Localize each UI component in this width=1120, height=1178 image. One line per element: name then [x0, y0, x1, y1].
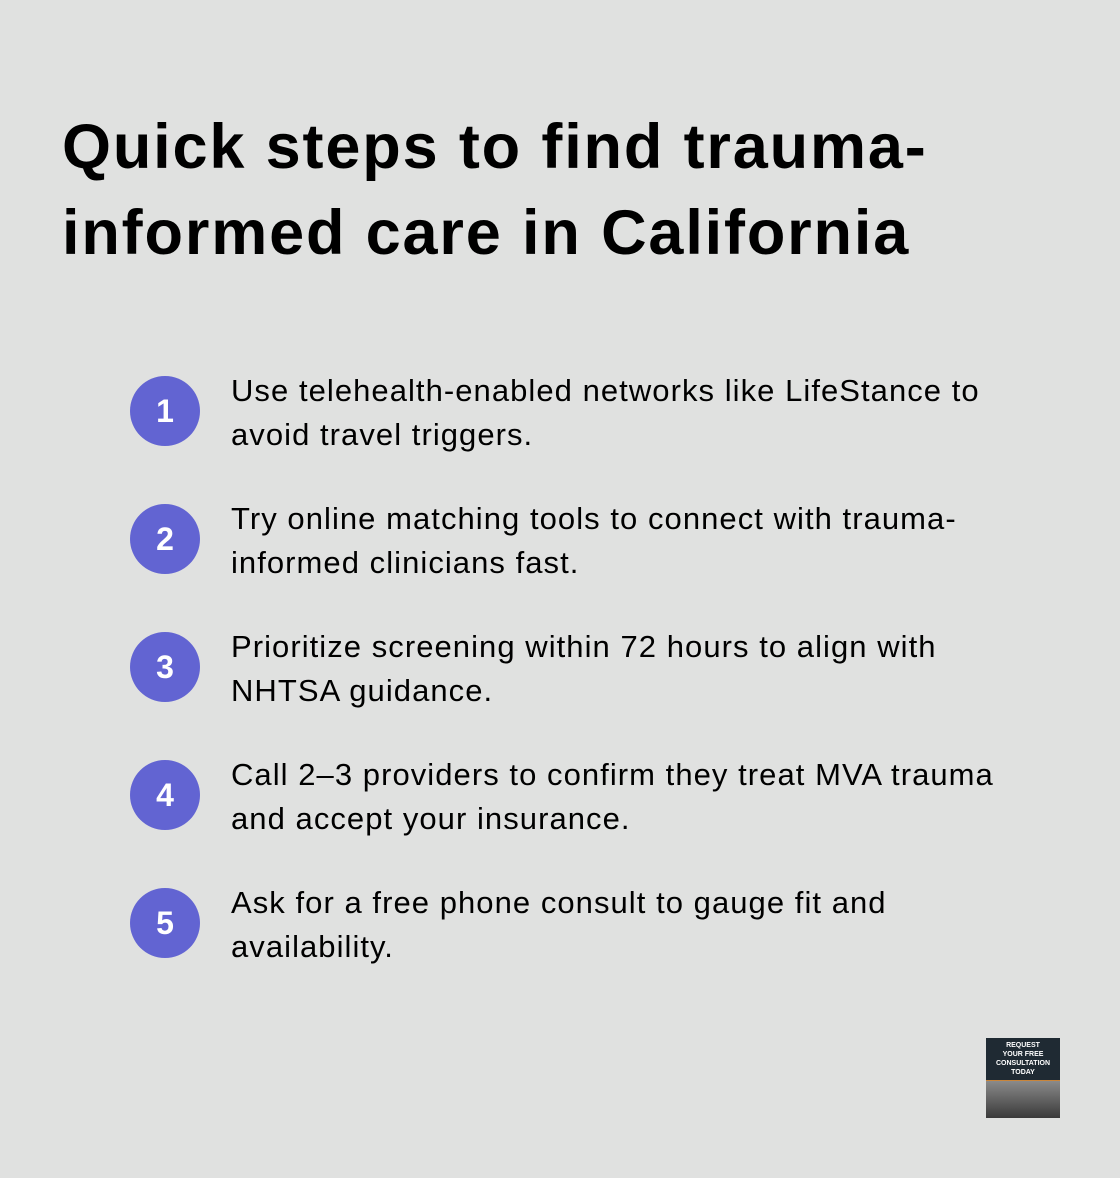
number circle 3 — [130, 632, 200, 702]
number circle 1 — [130, 376, 200, 446]
number circle 2: 2 — [156, 521, 174, 557]
title — [62, 112, 928, 268]
logo: consultation badge: TODAY — [1011, 1069, 1035, 1076]
step 1 — [130, 373, 980, 452]
step 1 text — [231, 373, 980, 452]
step 3 text: Prioritize screening within 72 hours to align with — [231, 629, 937, 664]
number circle 3: 3 — [156, 649, 174, 685]
logo: consultation badge: REQUEST — [1006, 1042, 1040, 1049]
step 2 — [130, 501, 957, 580]
step 4 — [130, 757, 994, 836]
step 1 text: Use telehealth-enabled networks like LifeStance to — [231, 373, 980, 408]
number circle 4 — [130, 760, 200, 830]
step 4 text: Call 2–3 providers to confirm they treat MVA trauma — [231, 757, 994, 792]
number circle 1: 1 — [156, 393, 174, 429]
number circle 5 — [130, 888, 200, 958]
title: Quick steps to find trauma- — [62, 112, 928, 182]
step 3 text — [231, 629, 937, 708]
step 5 text: Ask for a free phone consult to gauge fit and — [231, 885, 887, 920]
step 2 text — [231, 501, 957, 580]
step 2 text: Try online matching tools to connect with trauma- — [231, 501, 957, 536]
step 5 — [130, 885, 887, 964]
step 1 text: avoid travel triggers. — [231, 417, 533, 452]
step 5 text — [231, 885, 887, 964]
number circle 4: 4 — [156, 777, 174, 813]
number circle 2 — [130, 504, 200, 574]
logo: consultation badge: YOUR FREE — [1003, 1051, 1043, 1058]
step 2 text: informed clinicians fast. — [231, 545, 579, 580]
step 3 — [130, 629, 937, 708]
number circle 5: 5 — [156, 905, 174, 941]
logo: consultation badge — [986, 1038, 1060, 1117]
title: informed care in California — [62, 198, 910, 268]
step 4 text — [231, 757, 994, 836]
step 4 text: and accept your insurance. — [231, 801, 631, 836]
step 3 text: NHTSA guidance. — [231, 673, 493, 708]
step 5 text: availability. — [231, 929, 394, 964]
logo: consultation badge: CONSULTATION — [996, 1060, 1050, 1067]
